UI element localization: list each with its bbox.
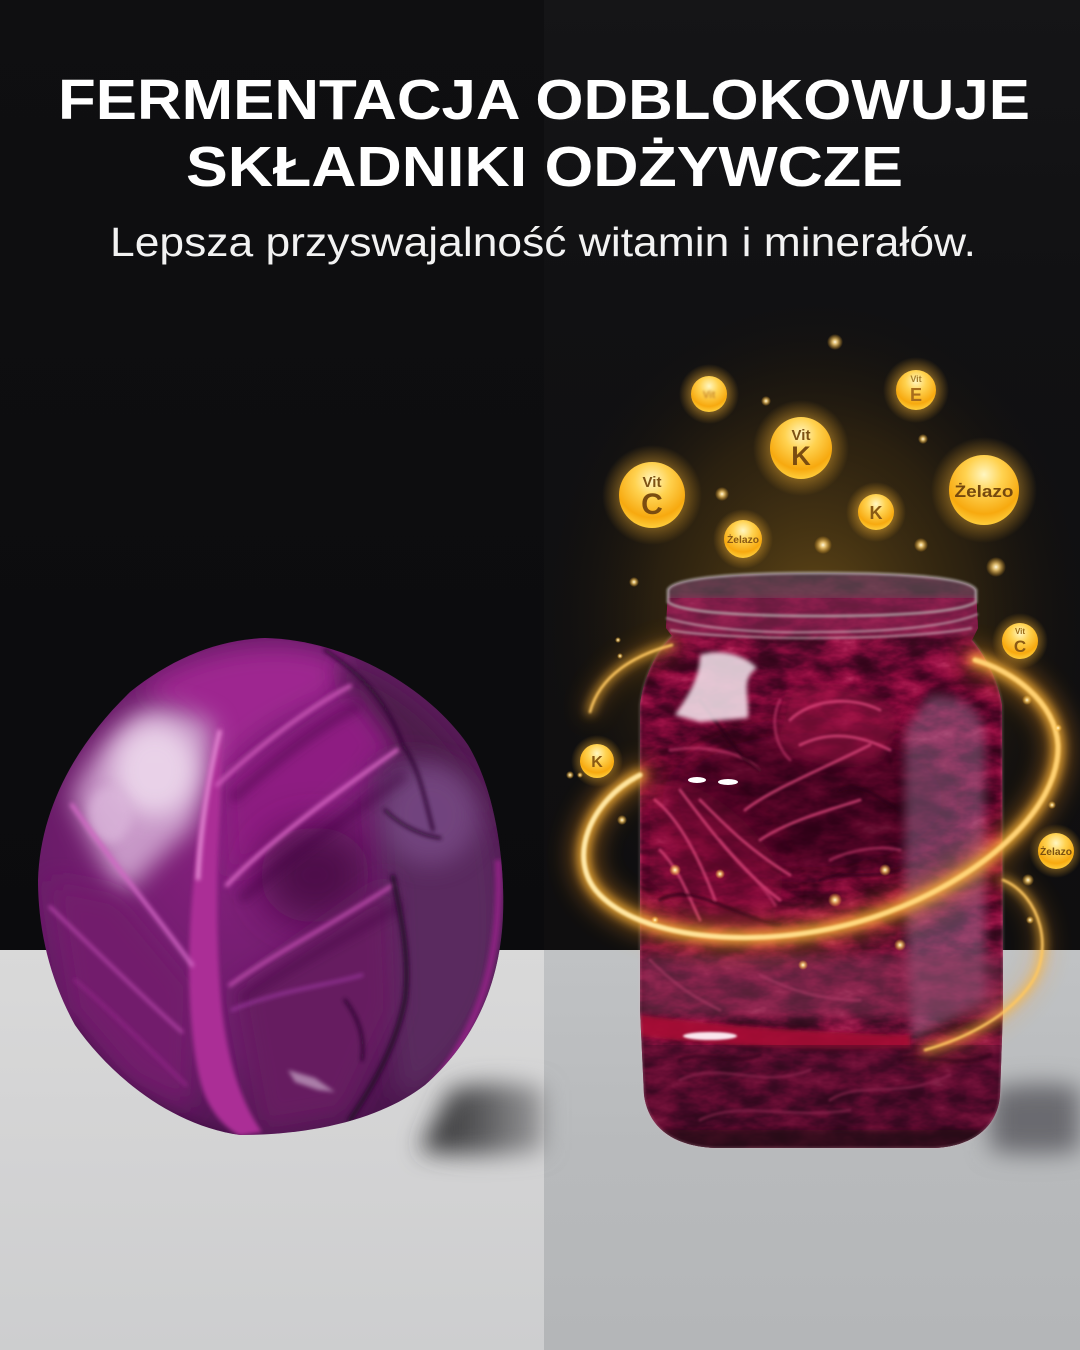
nutrient bubble: Vit C xyxy=(602,445,702,545)
nutrient bubble: Żelazo right: Żelazo xyxy=(1040,845,1072,858)
jar: thread xyxy=(666,614,978,638)
jar: lower highlight xyxy=(683,1032,737,1040)
cabbage: pale highlight xyxy=(72,707,214,895)
nutrient bubble: Vit E xyxy=(883,357,949,423)
nutrient bubble: K left: K xyxy=(591,754,603,771)
golden swirl arcs xyxy=(584,645,1058,1050)
background: right panel wall xyxy=(544,0,1080,950)
jar: dark interior xyxy=(670,725,950,875)
nutrient bubble: Vit C right: Vit xyxy=(1015,627,1025,636)
cabbage: right edge magenta rim xyxy=(432,860,499,1085)
background: left panel wall xyxy=(0,0,544,950)
title: FERMENTACJA ODBLOKOWUJE xyxy=(58,68,1030,132)
title: SKŁADNIKI ODŻYWCZE xyxy=(186,135,903,199)
glowing sparkles xyxy=(566,334,1062,970)
jar: red liquid band xyxy=(640,1015,910,1049)
nutrient bubble: Vit K xyxy=(753,400,849,496)
cabbage: side veins xyxy=(50,686,397,1085)
cabbage: central magenta leaves xyxy=(230,686,399,852)
nutrient bubble: Vit E: Vit xyxy=(910,374,922,384)
cabbage cast shadow xyxy=(420,1084,544,1154)
cabbage: lower left leaves xyxy=(50,880,195,1110)
cabbage: muted right side xyxy=(375,757,502,1100)
cabbage: main rib xyxy=(189,722,262,1136)
nutrient bubble: Żelazo right xyxy=(1029,824,1080,878)
nutrient bubble: Żelazo large: Żelazo xyxy=(954,482,1014,501)
cabbage: rib highlight xyxy=(198,730,220,880)
nutrient bubble: Vit C: Vit xyxy=(643,474,661,491)
jar: rim glass xyxy=(660,572,985,598)
jar: base tint xyxy=(635,570,1007,1152)
jar of fermented cabbage xyxy=(635,570,1007,1152)
cabbage: lavender patch on the right xyxy=(382,765,478,865)
nutrient bubble: Vit C right: C xyxy=(1014,637,1026,656)
nutrient bubble: K xyxy=(846,482,906,542)
warm glow behind the jar xyxy=(545,300,1080,940)
jar: crimson cabbage pieces xyxy=(775,686,900,764)
jar: rim xyxy=(668,573,976,616)
jar: dusty right glass reflection xyxy=(905,695,985,1040)
nutrient bubble: Żelazo small xyxy=(713,509,773,569)
nutrient bubble: small blurred: Vit xyxy=(703,390,716,401)
cabbage: upper right leaf xyxy=(332,660,468,773)
jar: magenta left shreds xyxy=(650,779,785,930)
jar: bottom dark edge xyxy=(660,1128,985,1148)
cabbage: lower centre leaf xyxy=(242,910,395,1134)
subtitle: Lepsza przyswajalność witamin i minerałów. xyxy=(110,219,976,265)
golden swirl outer glow xyxy=(584,645,1058,1050)
jar: body outline xyxy=(640,636,1003,1148)
background: right panel table surface xyxy=(544,950,1080,1350)
nutrient bubble: Vit C: C xyxy=(641,488,663,521)
nutrient bubble: K left xyxy=(571,735,623,787)
jar cast shadow xyxy=(990,1084,1080,1154)
jar: shredded texture xyxy=(635,570,1007,1152)
cabbage: upper band xyxy=(140,647,350,790)
jar: second seed highlight xyxy=(718,779,738,785)
nutrient bubble: Vit E: E xyxy=(910,385,922,405)
cabbage: dark cracks xyxy=(325,650,440,1120)
cabbage: dark hollow xyxy=(260,827,370,923)
cabbage: second highlight spot xyxy=(88,787,132,843)
nutrient bubble: Żelazo large xyxy=(931,437,1037,543)
nutrient bubble: K: K xyxy=(870,503,882,523)
jar: neck cabbage band xyxy=(665,596,980,636)
jar: small seed highlights xyxy=(688,777,706,783)
nutrient bubble: Vit C right xyxy=(992,613,1048,669)
nutrient bubble: Vit K: Vit xyxy=(792,427,810,444)
nutrient bubble: Vit K: K xyxy=(791,441,811,471)
jar: lower layer shading xyxy=(640,1045,1002,1150)
jar: contents xyxy=(635,570,1007,1152)
nutrient bubble: small blurred xyxy=(679,364,739,424)
nutrient bubble: Żelazo small: Żelazo xyxy=(727,533,759,546)
title xyxy=(58,68,1030,199)
red cabbage (raw) xyxy=(30,630,510,1145)
cabbage: side vein shadows xyxy=(232,705,405,1000)
cabbage: pale scuff mark xyxy=(288,1070,335,1092)
golden swirl glow xyxy=(584,645,1058,1050)
cabbage: lower rim shading xyxy=(74,1022,230,1134)
background: left panel table surface xyxy=(0,950,544,1350)
jar: shred strokes xyxy=(650,700,990,1120)
jar: white highlight xyxy=(675,652,757,722)
jar: lower cabbage haze xyxy=(640,955,1002,1017)
cabbage: brightest highlight xyxy=(113,724,197,816)
